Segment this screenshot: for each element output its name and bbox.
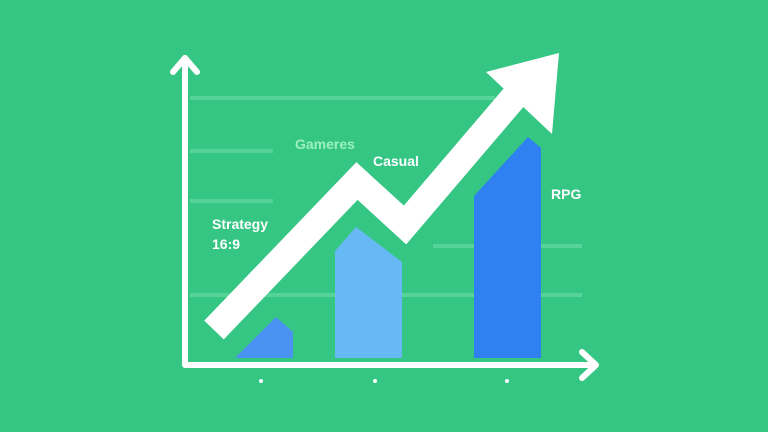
bar: strategy [235,317,293,358]
bar: rpg [474,137,541,358]
trend arrow [214,53,559,330]
x ticks [259,379,509,383]
label: Strategy 16:9: 16:9 [212,236,240,252]
bar: casual [335,227,402,358]
label: Strategy 16:9: Strategy [212,216,268,232]
label: Gameres: Gameres [295,136,355,152]
label: Casual: Casual [373,153,419,169]
axes [173,58,596,378]
label: RPG: RPG [551,186,581,202]
